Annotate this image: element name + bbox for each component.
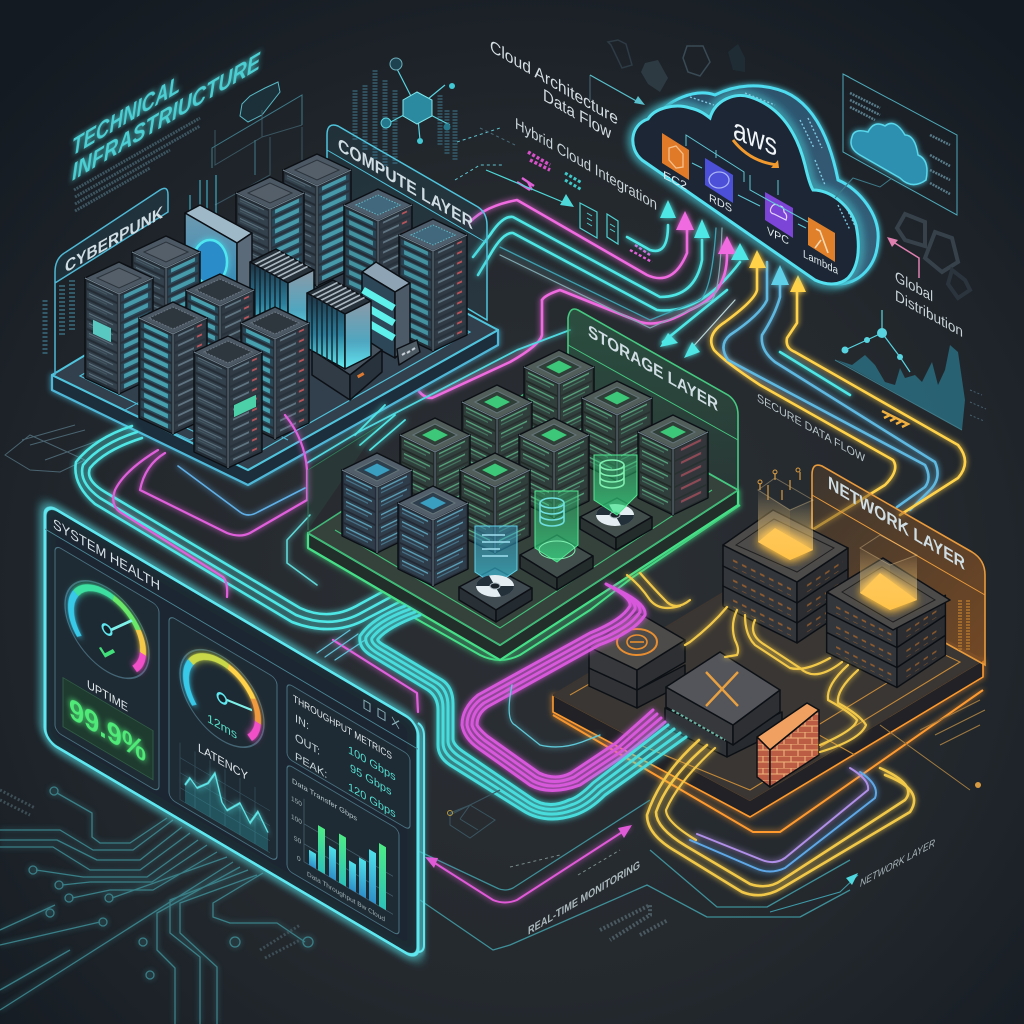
panel: latency <box>169 615 277 862</box>
panel: data transfer bar chart: Data Transfer Gbps <box>292 776 357 823</box>
labels: cloud architecture annotations: Cloud Architecture <box>490 35 618 129</box>
label: compute layer: COMPUTE LAYER <box>338 134 473 234</box>
panel: storage layer <box>308 309 740 660</box>
data lines: small diagram <box>5 425 100 472</box>
drive with hologram middle <box>520 491 593 590</box>
bars <box>309 802 386 910</box>
traces: monitoring lines <box>412 700 985 950</box>
main title <box>72 45 261 211</box>
panel: latency: LATENCY <box>198 740 248 784</box>
main title: INFRASTRIUCTURE <box>72 45 261 187</box>
stack: left switch stack with light <box>723 468 848 643</box>
gauge: latency <box>186 641 258 743</box>
drive with hologram right <box>580 455 652 550</box>
cloud: AWS services <box>633 86 878 284</box>
label: global distribution: Distribution <box>895 287 963 341</box>
decorative hexagons <box>608 40 970 298</box>
aws logo: aws <box>733 111 777 163</box>
router <box>589 612 685 708</box>
drive with disc hologram <box>459 526 532 622</box>
icon: cube node network <box>355 58 503 180</box>
icon: VPC <box>765 192 793 248</box>
labels: cloud architecture annotations <box>480 35 657 262</box>
decorative small text lines <box>0 790 300 958</box>
label: network layer small <box>770 837 935 912</box>
label: real-time monitoring: REAL-TIME MONITORING <box>528 858 640 938</box>
panel: data transfer bar chart: 150 <box>291 796 302 808</box>
title: system health: SYSTEM HEALTH <box>53 516 160 595</box>
panel: throughput metrics: IN: <box>295 711 309 733</box>
platform <box>553 555 983 832</box>
icon: EC2 <box>662 133 689 193</box>
cables: compute to cloud <box>307 200 740 463</box>
traces: circuit lines bottom-left <box>0 787 313 1024</box>
panel: data transfer bar chart: Data Throughput Bw Cloud <box>307 871 385 923</box>
icon: gear badge <box>215 82 302 205</box>
label: cyberpunk: CYBERPUNK <box>65 201 164 277</box>
label: global distribution: Global <box>895 268 933 306</box>
cables: cyan bundle to switch <box>360 606 686 819</box>
switch <box>665 652 782 757</box>
stack: right switch stack with light <box>827 535 950 688</box>
panel: system health dashboard <box>45 503 418 960</box>
panel: compute layer <box>45 95 498 485</box>
panel: data transfer bar chart: 50 <box>294 835 301 846</box>
icon: EC2: EC2 <box>663 169 687 193</box>
back panel <box>45 95 487 375</box>
labels: cloud architecture annotations: Data Flow <box>543 84 612 143</box>
panel: cloud hologram <box>835 74 957 215</box>
panel: uptime <box>55 545 159 792</box>
cables: network internal <box>627 573 914 895</box>
back panel <box>812 465 985 665</box>
storage racks <box>342 350 708 586</box>
main title: TECHNICAL <box>72 69 180 162</box>
chart: latency line <box>180 743 270 853</box>
icon: firewall <box>757 703 819 787</box>
platform <box>308 380 740 660</box>
back panel <box>308 309 738 530</box>
panel: throughput metrics: 95 Gbps <box>350 761 392 798</box>
icon: VPC: VPC <box>767 225 789 248</box>
panel: data transfer bar chart <box>287 764 399 936</box>
chart: global distribution area <box>835 310 986 430</box>
panel: throughput metrics <box>287 655 410 830</box>
panel: uptime: 99.9% <box>69 691 146 769</box>
dashboard side edge <box>418 723 424 952</box>
label: secure data flow: SECURE DATA FLOW <box>757 391 865 465</box>
icon: Lambda <box>803 217 838 278</box>
chevrons: data flow markers <box>882 411 908 427</box>
label: global distribution <box>887 237 963 341</box>
label: network layer small: NETWORK LAYER <box>860 837 935 890</box>
label: network layer: NETWORK LAYER <box>828 472 965 575</box>
cables: magenta bundle <box>462 584 665 790</box>
panel: latency: 12ms <box>207 711 237 742</box>
service connectors <box>686 135 808 228</box>
server racks <box>85 154 467 468</box>
panel: throughput metrics: OUT: <box>295 730 320 758</box>
panel: throughput metrics: PEAK: <box>295 749 327 781</box>
panel: data transfer bar chart: 0 <box>297 855 301 864</box>
platform <box>52 225 498 485</box>
arrowheads into cloud <box>660 200 806 358</box>
panel: network layer <box>553 465 985 832</box>
cables: network to cloud <box>663 262 965 530</box>
label: storage layer: STORAGE LAYER <box>588 320 718 415</box>
panel: throughput metrics: 120 Gbps <box>348 780 396 821</box>
icon: RDS <box>705 158 733 215</box>
labels: cloud architecture annotations: Hybrid Cloud Integration <box>515 114 657 214</box>
panel: throughput metrics: 100 Gbps <box>348 743 396 784</box>
gauge: uptime <box>71 572 143 674</box>
panel: throughput metrics: THROUGHPUT METRICS <box>293 693 392 762</box>
cables: compute cyan bundle to storage <box>75 405 418 712</box>
icon: Lambda: Lambda <box>803 248 838 278</box>
dashboard frame <box>45 503 418 960</box>
icon: RDS: RDS <box>709 192 732 215</box>
panel: data transfer bar chart: 100 <box>291 814 302 826</box>
panel: uptime: UPTIME <box>87 677 128 715</box>
